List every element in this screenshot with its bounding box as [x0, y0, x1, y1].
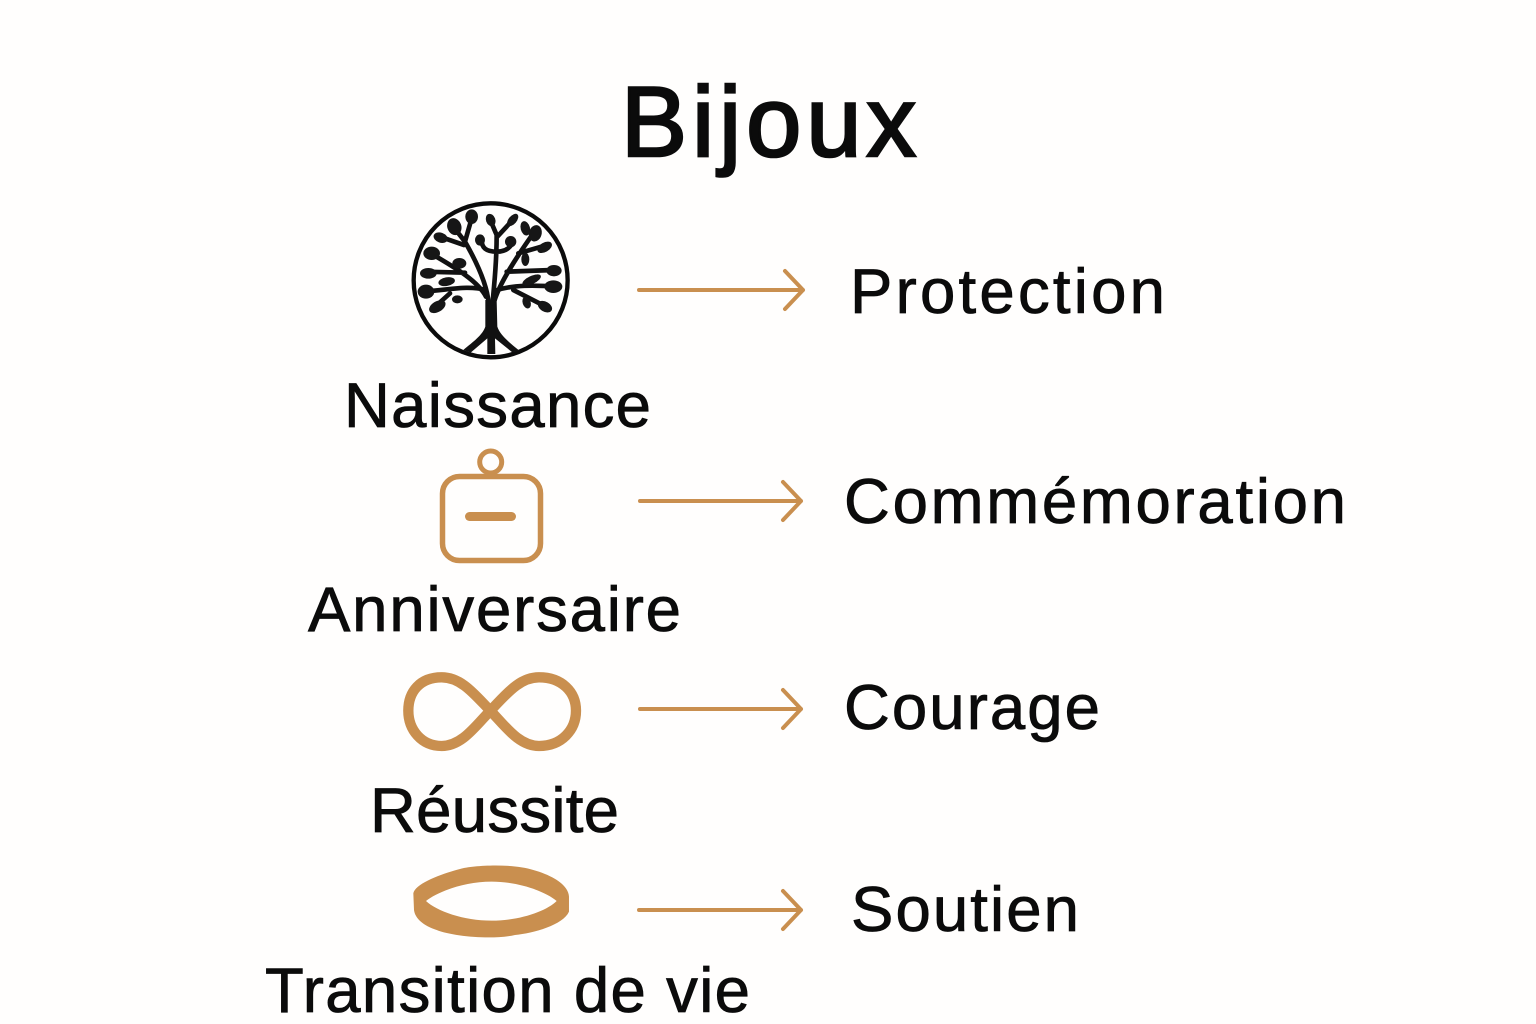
- icon: pendant: [442, 451, 540, 560]
- label: Transition de vie: Transition de vie: [265, 956, 750, 1024]
- icon: ring: [413, 865, 569, 937]
- title: Bijoux: [621, 66, 916, 177]
- label: Anniversaire: Anniversaire: [308, 575, 681, 645]
- label: Naissance: Naissance: [344, 371, 651, 441]
- label: Soutien: Soutien: [851, 875, 1079, 945]
- arrow: Naissance to Protection: [639, 271, 803, 309]
- icon: infinity: [408, 677, 576, 746]
- label: Réussite: Réussite: [370, 776, 619, 846]
- label: Protection: Protection: [850, 257, 1165, 327]
- label: Courage: Courage: [844, 673, 1100, 743]
- arrow: Réussite to Courage: [640, 690, 801, 728]
- arrow: Transition de vie to Soutien: [639, 891, 801, 929]
- icon: tree of life pendant: [414, 203, 568, 357]
- label: Commémoration: Commémoration: [844, 467, 1346, 537]
- arrow: Anniversaire to Commémoration: [640, 482, 801, 520]
